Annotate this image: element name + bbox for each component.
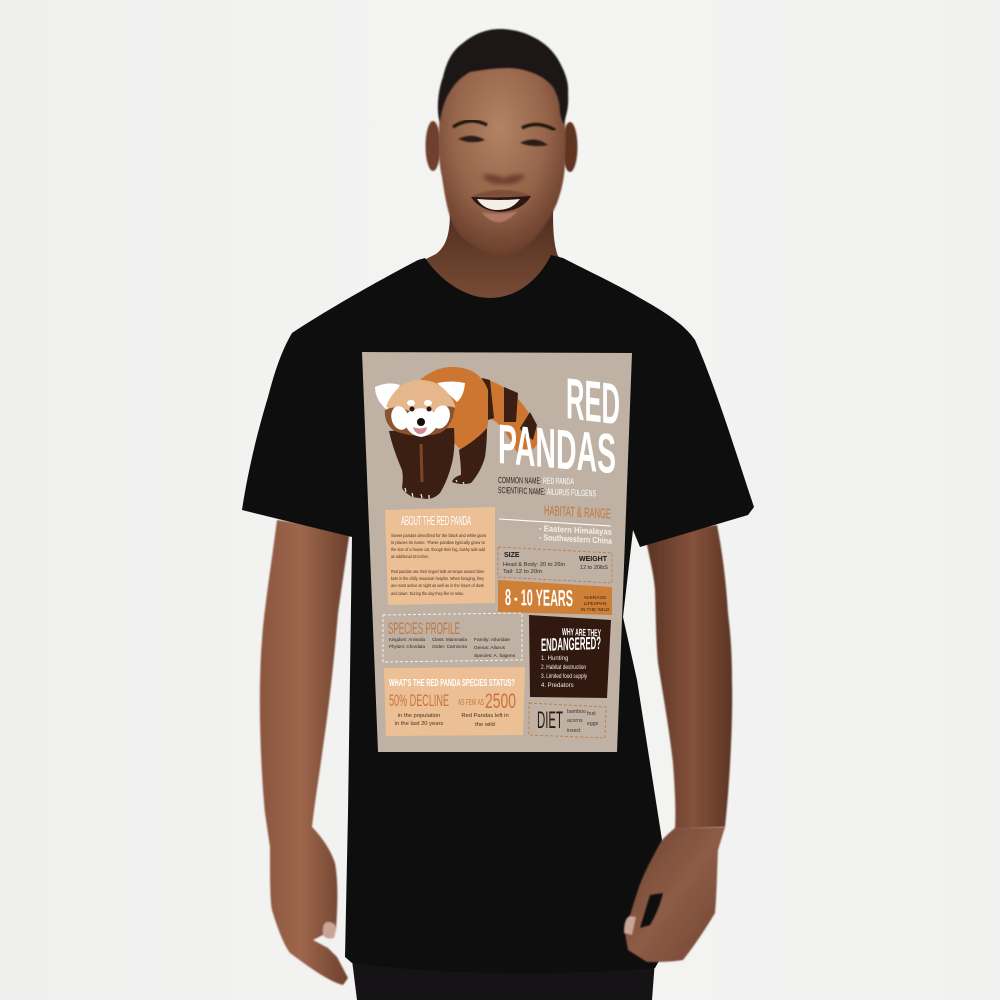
panel: size and weight: Head & Body: 20 to 26in <box>503 562 565 568</box>
mouth <box>471 196 531 212</box>
panel: diet: acorns <box>567 718 583 724</box>
panel: species profile: Kingdom: Animalia <box>389 637 425 643</box>
panel: species status: the wild <box>475 722 495 728</box>
panel: lifespan <box>498 580 612 615</box>
panel: why are they endangered: WHY ARE THEY <box>562 627 601 639</box>
leg highlight <box>421 444 422 482</box>
nose <box>482 174 525 184</box>
panel: lifespan: AVERAGE <box>584 595 606 601</box>
eyebrows <box>453 121 555 130</box>
panel: why are they endangered: ENDANGERED? <box>541 633 601 655</box>
model: neck and chest <box>420 210 565 310</box>
panel: about the red panda: is places its name. These pandas typically grow to <box>391 540 485 545</box>
ears <box>375 382 465 410</box>
panel: about the red panda: are most active at night as well as in the hours of dusk <box>391 583 485 588</box>
heading: habitat and range: HABITAT & RANGE <box>544 502 611 522</box>
panel: species profile: Genus: Ailurus <box>474 645 506 651</box>
panel: species status: in the last 20 years <box>395 721 443 727</box>
panel: size and weight <box>498 547 612 583</box>
panel: species status: in the population <box>398 713 440 719</box>
panel: species profile: Phylum: Chordata <box>389 644 425 650</box>
model: right hand <box>625 827 725 962</box>
divider: habitat <box>499 519 611 526</box>
model: arms and hands <box>260 520 732 985</box>
panel: species profile <box>383 613 522 662</box>
names <box>498 475 596 498</box>
trousers <box>352 960 655 1000</box>
panel: why are they endangered: 4. Predators <box>541 683 574 689</box>
panel: species status: WHAT'S THE RED PANDA SPECIES STATUS? <box>389 678 515 689</box>
model: head <box>426 29 578 256</box>
panel: species profile: Class: Mammalia <box>432 637 467 643</box>
habitat list: - Eastern Himalayas <box>539 523 612 537</box>
panel: species status: 2500 <box>485 690 516 713</box>
t-shirt <box>242 255 754 973</box>
panel: about the red panda: ABOUT THE RED PANDA <box>401 513 471 528</box>
front legs <box>389 428 454 499</box>
panel: about the red panda: the size of a house cat, though their big, bushy tails add <box>391 547 485 552</box>
panel: about the red panda <box>385 507 495 605</box>
claws <box>405 480 464 499</box>
body <box>418 367 488 450</box>
panel: why are they endangered <box>529 615 611 698</box>
panel: species status: AS FEW AS <box>458 698 484 707</box>
panel: about the red panda: an additional 18 inches. <box>391 554 429 559</box>
panel: about the red panda: Sweet pandas described for the black and white giant <box>391 533 487 538</box>
panel: lifespan: LIFESPAN <box>584 601 607 607</box>
cheeks <box>389 404 411 432</box>
panel: species status <box>384 667 525 736</box>
title: PANDAS <box>498 412 616 485</box>
red panda illustration <box>375 367 540 499</box>
poster background <box>362 352 632 752</box>
model: thumb nail <box>624 916 636 935</box>
face <box>405 408 438 437</box>
title <box>498 366 620 485</box>
panel: diet <box>529 703 606 738</box>
panel: diet: bamboo <box>567 709 586 715</box>
panel: why are they endangered: 2. Habitat destruction <box>541 665 586 671</box>
panel: lifespan: IN THE WILD <box>581 607 610 613</box>
panel: diet: eggs <box>587 721 599 727</box>
names: SCIENTIFIC NAME: AILURUS FULGENS <box>498 485 596 498</box>
panel: size and weight: 12 to 20lbS <box>580 565 608 571</box>
poster: RED <box>566 366 620 438</box>
panel: size and weight: SIZE <box>504 552 520 559</box>
ears <box>426 121 440 171</box>
panel: why are they endangered: 1. Hunting <box>541 656 568 662</box>
poster <box>362 352 632 752</box>
panel: about the red panda: Red pandas use their ringed tails as wraps around blan- <box>391 569 485 574</box>
panel: species profile: Family: Ailuridae <box>474 637 510 643</box>
habitat list <box>539 523 612 546</box>
tail <box>480 378 540 453</box>
panel: about the red panda: kets in the chilly mountain heights. When foraging, they <box>391 576 485 581</box>
names: COMMON NAME: RED PANDA <box>498 475 574 486</box>
face <box>439 50 566 256</box>
panel: size and weight: Tail: 12 to 20in <box>503 569 542 575</box>
panel: diet: fruit <box>587 711 596 717</box>
panel: why are they endangered: 3. Limited food supply <box>541 674 587 680</box>
panel: diet: insect <box>567 728 581 734</box>
hair <box>438 29 568 124</box>
tail stripes <box>482 378 537 440</box>
head <box>386 380 455 415</box>
panel: species profile: Order: Carnivora <box>432 644 467 650</box>
eyes <box>458 136 548 146</box>
panel: about the red panda: and dawn. During the day they like to relax. <box>391 591 464 596</box>
panel: diet: DIET <box>537 707 563 734</box>
panel: size and weight: WEIGHT <box>579 556 608 563</box>
panel: lifespan: 8 - 10 YEARS <box>505 584 573 611</box>
back leg <box>452 428 487 484</box>
panel: species status: 50% DECLINE <box>389 691 449 710</box>
panel: species profile: SPECIES PROFILE <box>388 619 460 638</box>
upper lip shade <box>472 190 530 198</box>
panel: species status: Red Pandas left in <box>461 713 509 719</box>
panel: species profile: Species: A. fulgens <box>474 653 516 659</box>
habitat list: - Southwestern China <box>539 532 612 546</box>
